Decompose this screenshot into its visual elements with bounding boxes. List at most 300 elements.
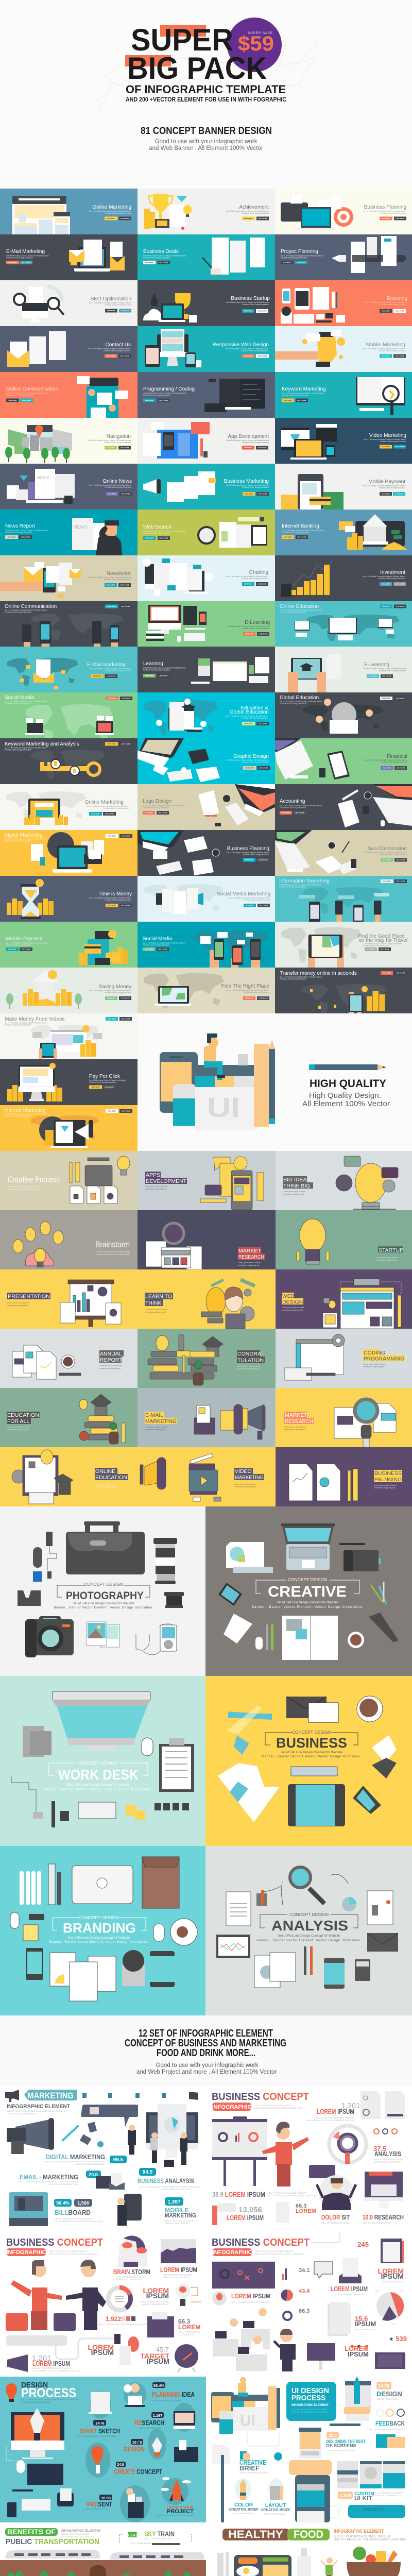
lorem ipsum stats: LOREM bbox=[178, 2324, 200, 2331]
text: Set of Flat Design Concept, Design for Website Banner bbox=[143, 667, 186, 669]
text: Set of Flat Design Concept, Design for Website Banner bbox=[226, 484, 269, 486]
banner: Brainstorm bbox=[0, 1210, 138, 1269]
banner: E-Mail Marketing line bbox=[138, 1388, 276, 1447]
text: Printable Vector Design Illustration bbox=[282, 532, 308, 534]
labels: DEVELOPMENT bbox=[146, 1178, 187, 1184]
text bbox=[226, 205, 269, 221]
sky train callout bbox=[119, 2530, 192, 2545]
text: Set of Flat Design Concept, Design for Website Banner bbox=[4, 838, 47, 840]
labels: consectetur adipiscing elit. bbox=[284, 1429, 306, 1431]
illustration: code laptop bbox=[204, 379, 265, 412]
lorem ipsum stats bbox=[98, 2284, 201, 2337]
text bbox=[280, 604, 406, 613]
banner: Keyword Marketing and Analysis bbox=[0, 738, 138, 784]
billboard stat bbox=[9, 2192, 102, 2226]
heading: CONCEPT DESIGN bbox=[292, 1730, 331, 1735]
text: LIKE / SHARE bbox=[259, 997, 268, 999]
text: Branding bbox=[387, 296, 407, 301]
text: READ MORE bbox=[107, 447, 115, 449]
stats bbox=[212, 2267, 404, 2320]
labels: RESEARCH bbox=[238, 1254, 264, 1260]
title: INFOGRAPHIC bbox=[212, 2104, 252, 2110]
labels: Lorem ipsum dolor sit amet, bbox=[145, 1185, 168, 1188]
text bbox=[227, 846, 270, 861]
text: Set of Flat Design Concept, Design for Website Banner bbox=[280, 609, 323, 611]
text: Business Startup bbox=[231, 296, 270, 301]
illustration: books and graduation cap bbox=[148, 1335, 223, 1385]
panel: photography concept bbox=[0, 1506, 205, 1676]
illustration: bank with coins bbox=[6, 970, 82, 1009]
illustration: monitor and magnifiers bbox=[14, 286, 64, 323]
panel: work desk concept bbox=[0, 1676, 205, 1846]
heading: PHOTOGRAPHY bbox=[66, 1590, 144, 1602]
illustration: laptop and envelopes bbox=[69, 240, 125, 272]
banner: Learning bbox=[138, 647, 275, 692]
labels: consectetur adipiscing elit. bbox=[374, 1487, 396, 1489]
panel: healthy food bbox=[206, 2522, 412, 2576]
digital marketing stat: 99.5 bbox=[113, 2157, 124, 2163]
stats: SED UT PERSPICIATIS UNDE OMNISTE bbox=[316, 2116, 354, 2119]
bottom stats: SED UT PERSPICIATIS UNDE OMNISTE bbox=[268, 2192, 306, 2194]
illustration: global education bbox=[144, 699, 218, 736]
panel: business concept infographic 1 bbox=[206, 2086, 412, 2232]
text: Printable Vector Design Illustration bbox=[280, 978, 306, 980]
illustration: meal tray bbox=[217, 2548, 311, 2576]
billboard stat: NATUS ERROR SIT VOLUPTATEMACCUSANTIUM bbox=[55, 2220, 102, 2223]
text: Financial bbox=[387, 754, 407, 759]
banner: Congratulation bbox=[138, 1329, 276, 1388]
text: Printable Vector Design Illustration bbox=[243, 854, 269, 856]
text: LIKE / SHARE bbox=[258, 493, 267, 495]
labels: Lorem ipsum dolor sit amet, bbox=[145, 1426, 167, 1428]
labels: consectetur adipiscing elit. bbox=[145, 1311, 166, 1313]
banner: Online Communication bbox=[0, 372, 138, 418]
labels: EDUCATION bbox=[95, 1475, 127, 1481]
text: LIKE / SHARE bbox=[122, 1110, 130, 1112]
text: Graphic Design bbox=[233, 754, 269, 759]
labels bbox=[7, 1293, 50, 1307]
stats: SED UT PERSPICIATIS bbox=[382, 2280, 404, 2283]
text: for Website Banner and printed materials bbox=[96, 1253, 130, 1256]
text: LIKE / SHARE bbox=[121, 905, 130, 907]
bottom stats: 10.9 RESEARCH bbox=[363, 2213, 404, 2221]
text: Printable Vector Design Illustration bbox=[379, 670, 406, 672]
heading: CONCEPT DESIGN bbox=[78, 1760, 117, 1766]
illustration: responsive devices bbox=[145, 329, 201, 367]
illustration: stationery bbox=[20, 1857, 179, 1908]
illustration: research documents bbox=[146, 1223, 202, 1269]
price badge: $59 bbox=[238, 32, 274, 55]
heading: Set of Flat Line Design Concept for Website bbox=[67, 1783, 129, 1787]
labels: consectetur adipiscing elit. bbox=[363, 1366, 385, 1368]
text: Navigation bbox=[107, 434, 131, 439]
illustration: tablet with hands bbox=[288, 654, 341, 692]
banner: Coding Programming bbox=[276, 1329, 412, 1388]
text: Set of Flat Design Concept, Design for Website Banner bbox=[89, 484, 132, 486]
text: Set of Flat Design Concept, Design for Website Banner bbox=[5, 530, 48, 532]
digital marketing stat bbox=[45, 2153, 127, 2165]
center wire and screens: OF SCREENS bbox=[326, 2443, 356, 2448]
text: READ MORE bbox=[8, 536, 16, 538]
text: E-Mail Marketing bbox=[87, 662, 126, 668]
text bbox=[363, 479, 406, 496]
text: Business Planning bbox=[227, 846, 269, 852]
color and layout stats: LAYOUT bbox=[265, 2503, 286, 2509]
title: MARKETING bbox=[27, 2091, 74, 2100]
section heading: 12 set of infographic element: CONCEPT OF BUSINESS AND MARKETING bbox=[125, 2038, 286, 2049]
illustration: person and bowl bbox=[321, 2547, 401, 2576]
illustration: laptop and clipboard bbox=[275, 738, 350, 779]
labels: REPORT bbox=[100, 1357, 123, 1363]
lorem ipsum stats: IPSUM bbox=[146, 2292, 169, 2300]
text: READ MORE bbox=[108, 605, 116, 607]
illustration: phone and pencils bbox=[218, 1582, 386, 1606]
bottom row: IPSUM bbox=[147, 2357, 169, 2365]
text: LIKE / SHARE bbox=[396, 605, 405, 607]
text: LIKE / SHARE bbox=[120, 447, 129, 449]
title: NATUS ERROR SIT VOLUPTATEMACCUSANTIUM bbox=[254, 2107, 302, 2109]
text: Printable Vector Design Illustration bbox=[105, 899, 131, 901]
text: Set of Flat Design Concept, Design for Website Banner bbox=[88, 439, 131, 442]
labels: MARKET bbox=[285, 1412, 307, 1418]
mobile marketing stat: OMNISTE ATUS ERROR bbox=[165, 2222, 188, 2225]
labels: Lorem ipsum dolor sit amet, bbox=[7, 1302, 30, 1304]
heading bbox=[256, 1912, 362, 1942]
text: Mobile Marketing bbox=[366, 342, 405, 348]
text: LIKE / SHARE bbox=[295, 812, 304, 814]
text: Printable Vector Design Illustration bbox=[143, 669, 170, 671]
text: Online Marketing bbox=[84, 800, 124, 805]
planning stages bbox=[89, 2382, 195, 2418]
text: Printable Vector Design Illustration bbox=[242, 578, 268, 580]
illustration: laptop and charts bbox=[275, 830, 356, 874]
text bbox=[89, 984, 132, 1000]
text: Printable Vector Design Illustration bbox=[363, 945, 389, 947]
text: Set of Flat Design Concept, Design for Website Banner bbox=[143, 942, 186, 944]
text: Set of Flat Design Concept, Design for Website Banner bbox=[226, 439, 269, 442]
labels: consectetur adipiscing elit. bbox=[234, 1486, 256, 1488]
text: Set of Flat Design Concept, Design for Website Banner bbox=[4, 1113, 47, 1115]
bottom stats: 66.3 bbox=[296, 2203, 306, 2209]
text: Business Deals bbox=[143, 249, 179, 255]
illustration: megaphone and mail bbox=[194, 1404, 265, 1439]
text: Printable Vector Design Illustration bbox=[244, 899, 270, 901]
title: NATUS ERROR SIT VOLUPTATE bbox=[61, 2535, 92, 2538]
banner: Responsive Web Design bbox=[138, 326, 275, 372]
banner: Internet Banking bbox=[275, 510, 412, 555]
labels: DESIGN bbox=[282, 1299, 303, 1306]
labels: MARKET bbox=[238, 1248, 261, 1254]
text: LIKE / SHARE bbox=[159, 537, 168, 539]
text: Printable Vector Design Illustration bbox=[5, 1024, 31, 1026]
illustration: UI designer bbox=[211, 2377, 280, 2434]
text: Printable Vector Design Illustration bbox=[280, 807, 306, 809]
text: LIKE / SHARE bbox=[258, 217, 267, 219]
text: LIKE / SHARE bbox=[121, 493, 130, 495]
bottom stats: NATUS ERROR SIT VOLUPTATEMACCUSANTIUM bbox=[268, 2194, 316, 2197]
text: LIKE / SHARE bbox=[395, 355, 404, 357]
panel: business concept bbox=[205, 1676, 412, 1846]
text: READ MORE bbox=[108, 835, 116, 837]
illustration: tablet and pen bbox=[339, 1543, 381, 1571]
text: Time is Money bbox=[98, 891, 132, 897]
text: Set of Flat Design Concept, Design for Website Banner bbox=[225, 348, 268, 350]
text: Set of Flat Design Concept, Design for Website Banner bbox=[280, 701, 323, 703]
stats: NATUS ERROR SIT VOLUPTATEMACCUSANTIUM bbox=[306, 2119, 354, 2122]
text bbox=[282, 386, 326, 402]
illustration: bottom documents and devices bbox=[26, 1948, 175, 2001]
banner: Newsletter bbox=[0, 555, 138, 601]
header: title block: SUPER bbox=[131, 23, 233, 57]
business analysis stat bbox=[138, 2168, 200, 2191]
text: Printable Vector Design Illustration bbox=[242, 761, 269, 764]
bottom stats bbox=[212, 2190, 404, 2225]
illustration: phone chat bbox=[77, 376, 128, 418]
banner: Seo Optimization desk bbox=[275, 830, 412, 876]
labels bbox=[376, 1246, 403, 1261]
text: LIKE / SHARE bbox=[259, 859, 268, 861]
title: INFOGRAPHIC ELEMENT bbox=[61, 2529, 101, 2533]
text bbox=[279, 878, 407, 888]
heading: CONCEPT DESIGN bbox=[289, 1912, 329, 1917]
labels: consectetur adipiscing elit. bbox=[95, 1486, 116, 1488]
text: READ MORE bbox=[244, 217, 252, 219]
email marketing stat: 20.5 bbox=[89, 2172, 98, 2177]
text: Transfer money online in seconds bbox=[280, 971, 357, 976]
text: Global Education bbox=[230, 709, 269, 715]
lorem ipsum stats: OMNISTE ATUS ERROR SIT bbox=[142, 2303, 169, 2306]
panel: marketing infographic bbox=[0, 2086, 206, 2232]
description: All Element 100% Vector bbox=[302, 1099, 390, 1108]
illustration: mobile apps bbox=[200, 1157, 264, 1210]
illustration: phones in hands bbox=[194, 930, 268, 968]
illustration: hand and newsletter bbox=[0, 562, 81, 598]
text: READ MORE bbox=[107, 217, 115, 219]
illustration: manager and monitor bbox=[309, 2165, 403, 2210]
text: READ MORE bbox=[244, 310, 252, 312]
labels bbox=[363, 1349, 405, 1368]
document and stats: SED UT PERSPICIATIS bbox=[355, 2328, 377, 2331]
banner: Digital Marketing bbox=[0, 830, 138, 876]
illustration: books on world map bbox=[295, 615, 400, 641]
illustration: magnifier over documents bbox=[334, 1399, 396, 1447]
text: Printable Vector Design Illustration bbox=[242, 486, 269, 488]
text: Set of Flat Design Concept, Design for Website Banner bbox=[280, 976, 323, 978]
text bbox=[84, 800, 130, 816]
description: High Quality Design. bbox=[309, 1091, 381, 1100]
text: READ MORE bbox=[107, 997, 115, 999]
design feedback stats bbox=[369, 2382, 405, 2431]
text: READ MORE bbox=[382, 355, 390, 357]
text: READ MORE bbox=[383, 859, 391, 861]
banner: Make Money From Videos bbox=[0, 1013, 138, 1059]
sky train callout: SKY TRAIN bbox=[144, 2530, 175, 2538]
illustration: thinking student bbox=[201, 1280, 255, 1329]
stats: 66.3 bbox=[299, 2308, 310, 2314]
text: Printable Vector Design Illustration bbox=[143, 533, 170, 535]
mobile marketing stat: SED UT PERSPICIATIS UNDE bbox=[165, 2219, 194, 2222]
labels: Lorem ipsum dolor sit amet, bbox=[284, 1426, 307, 1428]
heading: HIGH QUALITY bbox=[310, 1078, 386, 1090]
present stage: PRESENT bbox=[87, 2500, 112, 2508]
text: LIKE / SHARE bbox=[22, 399, 31, 401]
text: Learning bbox=[143, 661, 163, 667]
text: Set of Flat Design Concept, Design for Website Banner bbox=[89, 990, 132, 992]
text: Printable Vector Design Illustration bbox=[143, 807, 169, 809]
text: Printable Vector Design Illustration bbox=[242, 717, 268, 719]
text: for Website Banner and printed materials bbox=[8, 1189, 41, 1191]
lorem ipsum stats: SED UT PERSPICIATIS bbox=[178, 2331, 200, 2333]
heading: Banner , Banner Vector Element. Vector Design Illustration. bbox=[252, 1605, 363, 1609]
text: Global Education bbox=[280, 695, 319, 701]
text bbox=[89, 1074, 126, 1089]
text: LIKE / SHARE bbox=[396, 859, 405, 861]
text: Printable Vector Design Illustration bbox=[89, 1081, 116, 1083]
labels: consectetur adipiscing elit. bbox=[283, 1193, 304, 1195]
color and layout stats: CREATIVE BRIEF bbox=[261, 2509, 291, 2512]
banner: Global Education bbox=[275, 692, 412, 738]
text: E-Learning bbox=[364, 662, 389, 668]
text: Printable Vector Design Illustration bbox=[105, 304, 131, 306]
text bbox=[363, 662, 406, 678]
sky train callout: SED UT PERSPICIATIS bbox=[130, 2542, 152, 2545]
text: READ MORE bbox=[92, 1086, 100, 1088]
text: LIKE / SHARE bbox=[258, 355, 267, 357]
text: Printable Vector Design Illustration bbox=[281, 257, 307, 259]
text: Set of Flat Design Concept, Design for Website Banner bbox=[87, 805, 130, 807]
stats: OMNISTE ATUS ERROR SIT bbox=[374, 2161, 402, 2163]
lorem ipsum stats: ATUS ERROR SIT bbox=[178, 2333, 196, 2336]
text: LIKE / SHARE bbox=[120, 355, 129, 357]
labels bbox=[7, 1412, 40, 1431]
create concept stage: 24.9 bbox=[117, 2463, 124, 2467]
bottom row bbox=[6, 2334, 198, 2372]
custom ui kit: UI KIT bbox=[354, 2495, 372, 2502]
labels: TULATION bbox=[237, 1357, 264, 1363]
text bbox=[4, 1108, 132, 1117]
illustration: laptop map bbox=[144, 973, 224, 1009]
illustration: online books and bulb bbox=[12, 1450, 73, 1504]
illustration: stationery set bbox=[281, 287, 345, 324]
heading: WORK DESK bbox=[58, 1767, 139, 1783]
labels: E-MAIL bbox=[145, 1412, 163, 1418]
banner: Market Research bbox=[138, 1210, 276, 1269]
text: LIKE / SHARE bbox=[158, 948, 167, 950]
illustration: presentation board bbox=[60, 1280, 121, 1327]
text: Set of Flat Design Concept, Design for Website Banner bbox=[143, 805, 186, 807]
illustration: newspaper reporter: NEWS bbox=[74, 524, 88, 530]
title: PROCESS bbox=[21, 2386, 76, 2400]
title bbox=[6, 2237, 103, 2256]
text: E-Learning bbox=[245, 620, 270, 625]
text: Printable Vector Design Illustration bbox=[143, 395, 170, 397]
title: VOLUPTATEMACCUSANTIUM bbox=[21, 2401, 50, 2403]
bottom row: TARGET bbox=[140, 2352, 169, 2360]
banner: Education and Global Education bbox=[138, 692, 275, 738]
labels: consectetur adipiscing elit. bbox=[145, 1188, 167, 1190]
illustration: UI designer bbox=[160, 1033, 275, 1130]
labels: consectetur adipiscing elit. bbox=[376, 1259, 398, 1261]
text: Set of Flat Design Concept, Design for Website Banner bbox=[5, 747, 48, 749]
text: Set of Flat Design Concept, Design for Website Banner bbox=[364, 210, 407, 212]
heading: CREATIVE bbox=[268, 1584, 347, 1600]
banner: Investment bbox=[275, 555, 412, 601]
illustration: megaphone of documents bbox=[144, 884, 224, 914]
custom ui kit bbox=[330, 2491, 405, 2518]
banner: Keyword Marketing bbox=[275, 372, 412, 418]
text: Printable Vector Design Illustration bbox=[6, 395, 33, 397]
text bbox=[143, 661, 186, 677]
text: LIKE / SHARE bbox=[121, 217, 130, 219]
stats bbox=[306, 2102, 403, 2163]
text: READ MORE bbox=[108, 905, 116, 907]
labels bbox=[238, 1247, 265, 1266]
text: Printable Vector Design Illustration bbox=[243, 628, 270, 630]
text: Set of Flat Design Concept, Design for Website Banner bbox=[227, 989, 270, 991]
text: READ MORE bbox=[244, 355, 252, 357]
section heading: 81 concept banner design: Good to use with your infographic work bbox=[155, 139, 258, 145]
banner: Mobile Payment shop bbox=[0, 922, 138, 968]
text: Set of Flat Design Concept, Design for Website Banner bbox=[227, 625, 270, 628]
text: Set of Flat Design Concept, Design for Website Banner bbox=[226, 759, 269, 761]
title: BUSINESS CONCEPT bbox=[212, 2237, 310, 2248]
illustration: letters and envelope bbox=[7, 331, 66, 367]
panel: branding concept bbox=[0, 1846, 205, 2015]
title: NATUS ERROR SIT VOLUPTATEMACCUSANTIUM bbox=[49, 2252, 97, 2255]
text: Set of Flat Design Concept, Design for Website Banner bbox=[6, 255, 49, 257]
mobile marketing stat: MOBILE bbox=[165, 2207, 189, 2214]
text: LIKE / SHARE bbox=[297, 399, 306, 401]
text: READ MORE bbox=[382, 310, 390, 312]
illustration: online store bbox=[6, 791, 87, 825]
email marketing stat: VOLUPTATEM ACCUSANTIUM bbox=[49, 2183, 78, 2185]
text: LIKE / SHARE bbox=[121, 997, 130, 999]
labels bbox=[99, 1350, 124, 1369]
text: Printable Vector Design Illustration bbox=[242, 442, 269, 444]
illustration: video screen and coins bbox=[31, 1025, 102, 1059]
illustration: monitor bbox=[53, 1691, 150, 1751]
text: Printable Vector Design Illustration bbox=[143, 944, 169, 946]
banner: App Development bbox=[138, 418, 275, 464]
banner: Online Communication world bbox=[0, 601, 138, 666]
sketch stage: START SKETCH bbox=[80, 2427, 120, 2435]
illustration: documents bbox=[216, 1891, 398, 1989]
sketch stage bbox=[77, 2420, 120, 2437]
illustration: searching on devices bbox=[299, 887, 389, 944]
text: READ MORE bbox=[382, 605, 390, 607]
labels: Lorem ipsum dolor sit amet, bbox=[238, 1262, 261, 1264]
banner: Annual Report bbox=[0, 1329, 138, 1388]
illustration: monitor and coins bbox=[7, 1063, 62, 1101]
document and stats: IPSUM bbox=[355, 2320, 376, 2328]
illustration: browser and phone bbox=[12, 196, 70, 234]
text bbox=[95, 1240, 130, 1256]
text: Set of Flat Design Concept, Design for Website Banner bbox=[89, 897, 132, 899]
banner: Web Search bbox=[138, 510, 275, 555]
illustration: study desk bbox=[146, 605, 207, 642]
text: LIKE / SHARE bbox=[259, 767, 268, 769]
stats: SED UT PERSPICIATIS UNDE bbox=[335, 2293, 363, 2296]
text: READ MORE bbox=[107, 310, 115, 312]
text bbox=[226, 296, 270, 313]
text: READ MORE bbox=[108, 698, 116, 700]
banner: Contact Us bbox=[0, 326, 138, 372]
text: Printable Vector Design Illustration bbox=[380, 440, 406, 443]
text: LIKE / SHARE bbox=[396, 880, 405, 882]
labels: RESEARCH bbox=[285, 1418, 313, 1425]
banner: Transfer money online bbox=[275, 968, 412, 1014]
illustration: bulbs and brain bbox=[13, 1222, 63, 1267]
